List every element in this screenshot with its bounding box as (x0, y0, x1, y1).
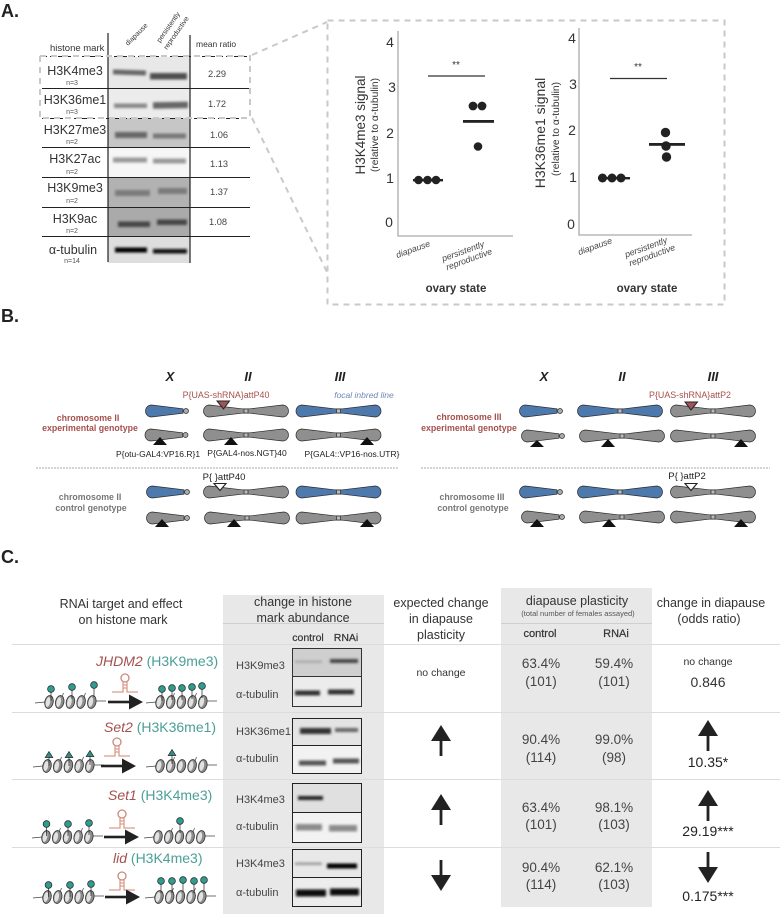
odds ratio: 10.35* (688, 754, 729, 770)
driver labels: P{otu-GAL4:VP16.R}1 (116, 449, 200, 459)
column headers: diapause (124, 22, 150, 47)
y axis title: H3K36me1 signal (532, 78, 548, 188)
control genotype label: chromosome II (59, 492, 121, 502)
expected change arrow (431, 860, 451, 891)
chromosome headings (539, 369, 719, 384)
row labels and ratios: 1.08 (209, 217, 227, 227)
y tick labels: 1 (386, 170, 394, 186)
column heading: odds ratio: change in diapause (657, 596, 765, 610)
nucleosome schematic (33, 872, 216, 904)
attP40 control label: P{ }attP40 (203, 472, 245, 483)
expected change arrow (431, 794, 451, 825)
column heading: RNAi target (60, 597, 183, 627)
nucleosome schematic (35, 674, 217, 710)
row labels and ratios: 1.06 (210, 130, 228, 140)
y tick labels: 3 (569, 76, 577, 92)
column headers: persistently (156, 11, 182, 44)
data points (598, 128, 685, 182)
control genotype label (437, 492, 509, 513)
percentages (522, 732, 633, 765)
column heading: RNAi target: on histone mark (79, 613, 168, 627)
experimental chromosomes (520, 402, 756, 447)
y tick labels: 3 (388, 79, 396, 95)
column heading: odds ratio (657, 596, 765, 626)
experimental chromosomes (145, 401, 381, 445)
row labels and ratios (44, 64, 228, 265)
percentages: 99.0% (595, 732, 633, 747)
column heading: RNAi target: RNAi target and effect (60, 597, 183, 611)
percentages: 90.4% (522, 860, 560, 875)
control genotype label (55, 492, 127, 513)
expected change: no change (416, 667, 466, 679)
significance bar (428, 60, 485, 76)
y axis title: (relative to α-tubulin) (370, 78, 381, 172)
percentages: 63.4% (522, 656, 560, 671)
column headers: reproductive (163, 15, 191, 51)
odds ratio (682, 852, 734, 904)
x labels: diapause (394, 238, 432, 260)
odds ratio: 0.846 (690, 674, 726, 690)
odds ratio: 29.19*** (682, 823, 734, 839)
chromosome headings (165, 369, 346, 384)
table grid lines (42, 33, 250, 263)
y tick labels: 0 (385, 214, 393, 230)
odds ratio (683, 656, 733, 690)
x axis title: ovary state (617, 283, 677, 295)
column heading: odds ratio: (odds ratio) (677, 612, 741, 626)
y axis title: H3K4me3 signal (353, 75, 368, 175)
percentages (522, 860, 633, 892)
row: lid (33, 850, 734, 906)
significance bar: ** (634, 62, 642, 73)
y tick labels (567, 30, 577, 232)
row labels and ratios: H3K9ac (53, 212, 97, 226)
chromosome headings: III (708, 369, 719, 384)
driver labels: P{GAL4::VP16-nos.UTR} (305, 449, 400, 459)
row labels and ratios: 2.29 (208, 69, 226, 79)
percentages: (101) (525, 817, 557, 832)
section label A: A. (1, 1, 19, 21)
column heading: diapause plasticity: diapause plasticity (526, 594, 629, 608)
chromosome headings: X (165, 369, 176, 384)
row labels and ratios: H3K4me3 (47, 64, 103, 78)
target label: Set1 (H3K4me3) (108, 787, 212, 803)
x labels: persistently (439, 239, 486, 264)
control genotype label: chromosome III (439, 492, 505, 502)
nucleosome schematic (32, 810, 215, 844)
y tick labels: 1 (569, 169, 577, 185)
experimental genotype label: experimental genotype (42, 423, 138, 433)
blot (236, 784, 362, 842)
section label C: C. (1, 547, 19, 567)
blot: α-tubulin (236, 887, 278, 899)
data points (413, 102, 494, 184)
row separators (12, 624, 780, 848)
target label: JHDM2 (H3K9me3) (95, 653, 218, 669)
percentages: 59.4% (595, 656, 633, 671)
experimental genotype label: chromosome III (436, 412, 502, 422)
row labels and ratios: 1.13 (210, 159, 228, 169)
row labels and ratios: 1.37 (210, 187, 228, 197)
column headers (50, 11, 236, 54)
blot: H3K4me3 (236, 794, 285, 806)
row labels and ratios: H3K27ac (49, 152, 101, 166)
blot (236, 718, 362, 774)
percentages: 98.1% (595, 800, 633, 815)
percentages: 62.1% (595, 860, 633, 875)
chromosome headings: II (618, 369, 626, 384)
expected change arrow (431, 725, 451, 756)
chart: H3K36me1 signal (532, 28, 692, 295)
column heading: histone abundance: mark abundance (256, 611, 350, 625)
panel B right: chromosome III genotypes (421, 369, 770, 527)
blot: α-tubulin (236, 821, 278, 833)
percentages: (103) (598, 877, 630, 892)
row labels and ratios: 1.72 (208, 99, 226, 109)
row labels and ratios: H3K36me1 (44, 93, 106, 107)
percentages: (114) (526, 877, 556, 892)
row labels and ratios: n=3 (66, 109, 78, 116)
percentages: (98) (602, 750, 626, 765)
driver labels (116, 448, 400, 459)
percentages: 90.4% (522, 732, 560, 747)
row: Set1 (32, 784, 734, 844)
blot: H3K9me3 (236, 660, 285, 672)
column heading: expected change (393, 596, 489, 642)
column heading: diapause plasticity (521, 594, 635, 640)
odds ratio: no change (683, 656, 733, 668)
experimental genotype label: experimental genotype (421, 423, 517, 433)
blot (236, 850, 362, 906)
y tick labels: 2 (568, 122, 576, 138)
blot (236, 648, 362, 706)
column heading: expected change: plasticity (417, 628, 466, 642)
callout: dashed highlight and connectors (40, 20, 724, 304)
column headers: histone mark (50, 43, 105, 54)
significance bar: ** (452, 60, 460, 71)
x labels: reproductive (445, 246, 494, 272)
gray column backgrounds (223, 588, 652, 914)
shRNA insertion label: P{UAS-shRNA}attP2 (649, 390, 731, 400)
column heading: diapause plasticity: RNAi (603, 628, 629, 640)
driver labels: P{GAL4-nos.NGT}40 (207, 448, 287, 458)
blot: H3K36me1 (236, 726, 291, 738)
target label: lid (H3K4me3) (113, 850, 202, 866)
row labels and ratios: n=3 (66, 80, 78, 87)
row labels and ratios: n=14 (64, 258, 80, 265)
percentages: (114) (526, 750, 556, 765)
focal line label: focal inbred line (334, 390, 394, 400)
y tick labels: 4 (386, 34, 394, 50)
control chromosomes (146, 484, 381, 527)
significance bar (610, 62, 667, 78)
percentages: (101) (598, 674, 630, 689)
section label B: B. (1, 306, 19, 326)
nucleosome schematic (33, 738, 217, 774)
y axis title (353, 75, 381, 175)
chromosome headings: II (244, 369, 252, 384)
percentages (522, 800, 633, 832)
chart: H3K4me3 signal (353, 31, 513, 295)
y tick labels: 4 (568, 30, 576, 46)
experimental genotype label (421, 412, 517, 433)
blot: H3K4me3 (236, 858, 285, 870)
panel B left: chromosome II genotypes (36, 369, 400, 527)
column heading: expected change: expected change (393, 596, 489, 610)
row: JHDM2 (35, 648, 733, 710)
chromosome headings: III (335, 369, 346, 384)
row labels and ratios: n=2 (66, 169, 78, 176)
y tick labels: 2 (386, 125, 394, 141)
y tick labels (385, 34, 396, 230)
percentages: (103) (598, 817, 630, 832)
percentages (522, 656, 633, 689)
odds ratio (688, 720, 729, 770)
blot: α-tubulin (236, 753, 278, 765)
percentages: 63.4% (522, 800, 560, 815)
column heading: histone abundance: control (292, 632, 324, 644)
row labels and ratios: n=2 (66, 228, 78, 235)
x axis title: ovary state (426, 283, 486, 295)
x labels: persistently (622, 235, 669, 260)
blot: α-tubulin (236, 689, 278, 701)
experimental genotype label: chromosome II (57, 413, 119, 423)
panel C: RNAi results table (12, 588, 780, 914)
y tick labels: 0 (567, 216, 575, 232)
blot image backgrounds and bands (108, 57, 190, 263)
x labels (394, 238, 494, 272)
column headers: mean ratio (196, 39, 236, 49)
target label: Set2 (H3K36me1) (104, 719, 216, 735)
row: Set2 (33, 718, 729, 774)
attP2 control label: P{ }attP2 (668, 471, 706, 482)
y axis title (532, 78, 562, 188)
control genotype label: control genotype (437, 503, 509, 513)
row labels and ratios: H3K9me3 (47, 181, 103, 195)
row labels and ratios: α-tubulin (49, 243, 97, 257)
chromosome headings: X (539, 369, 550, 384)
odds ratio (682, 790, 734, 839)
column heading: histone abundance: RNAi (334, 632, 358, 644)
column heading: histone abundance: change in histone (254, 595, 352, 609)
column heading: diapause plasticity: (total number of females assayed) (521, 609, 635, 618)
row labels and ratios: n=2 (66, 139, 78, 146)
panel A: western blot table (42, 11, 250, 265)
column heading: histone abundance (254, 595, 358, 644)
percentages: (101) (525, 674, 557, 689)
x labels (576, 235, 677, 268)
row labels and ratios: n=2 (66, 198, 78, 205)
y axis title: (relative to α-tubulin) (551, 82, 562, 176)
odds ratio: 0.175*** (682, 888, 734, 904)
control genotype label: control genotype (55, 503, 127, 513)
x labels: diapause (576, 235, 614, 257)
shRNA insertion label: P{UAS-shRNA}attP40 (183, 390, 269, 400)
x labels: reproductive (628, 242, 677, 268)
control chromosomes (520, 484, 756, 527)
row labels and ratios: H3K27me3 (44, 123, 106, 137)
column heading: expected change: in diapause (409, 612, 473, 626)
column heading: diapause plasticity: control (523, 628, 557, 640)
experimental genotype label (42, 413, 138, 433)
